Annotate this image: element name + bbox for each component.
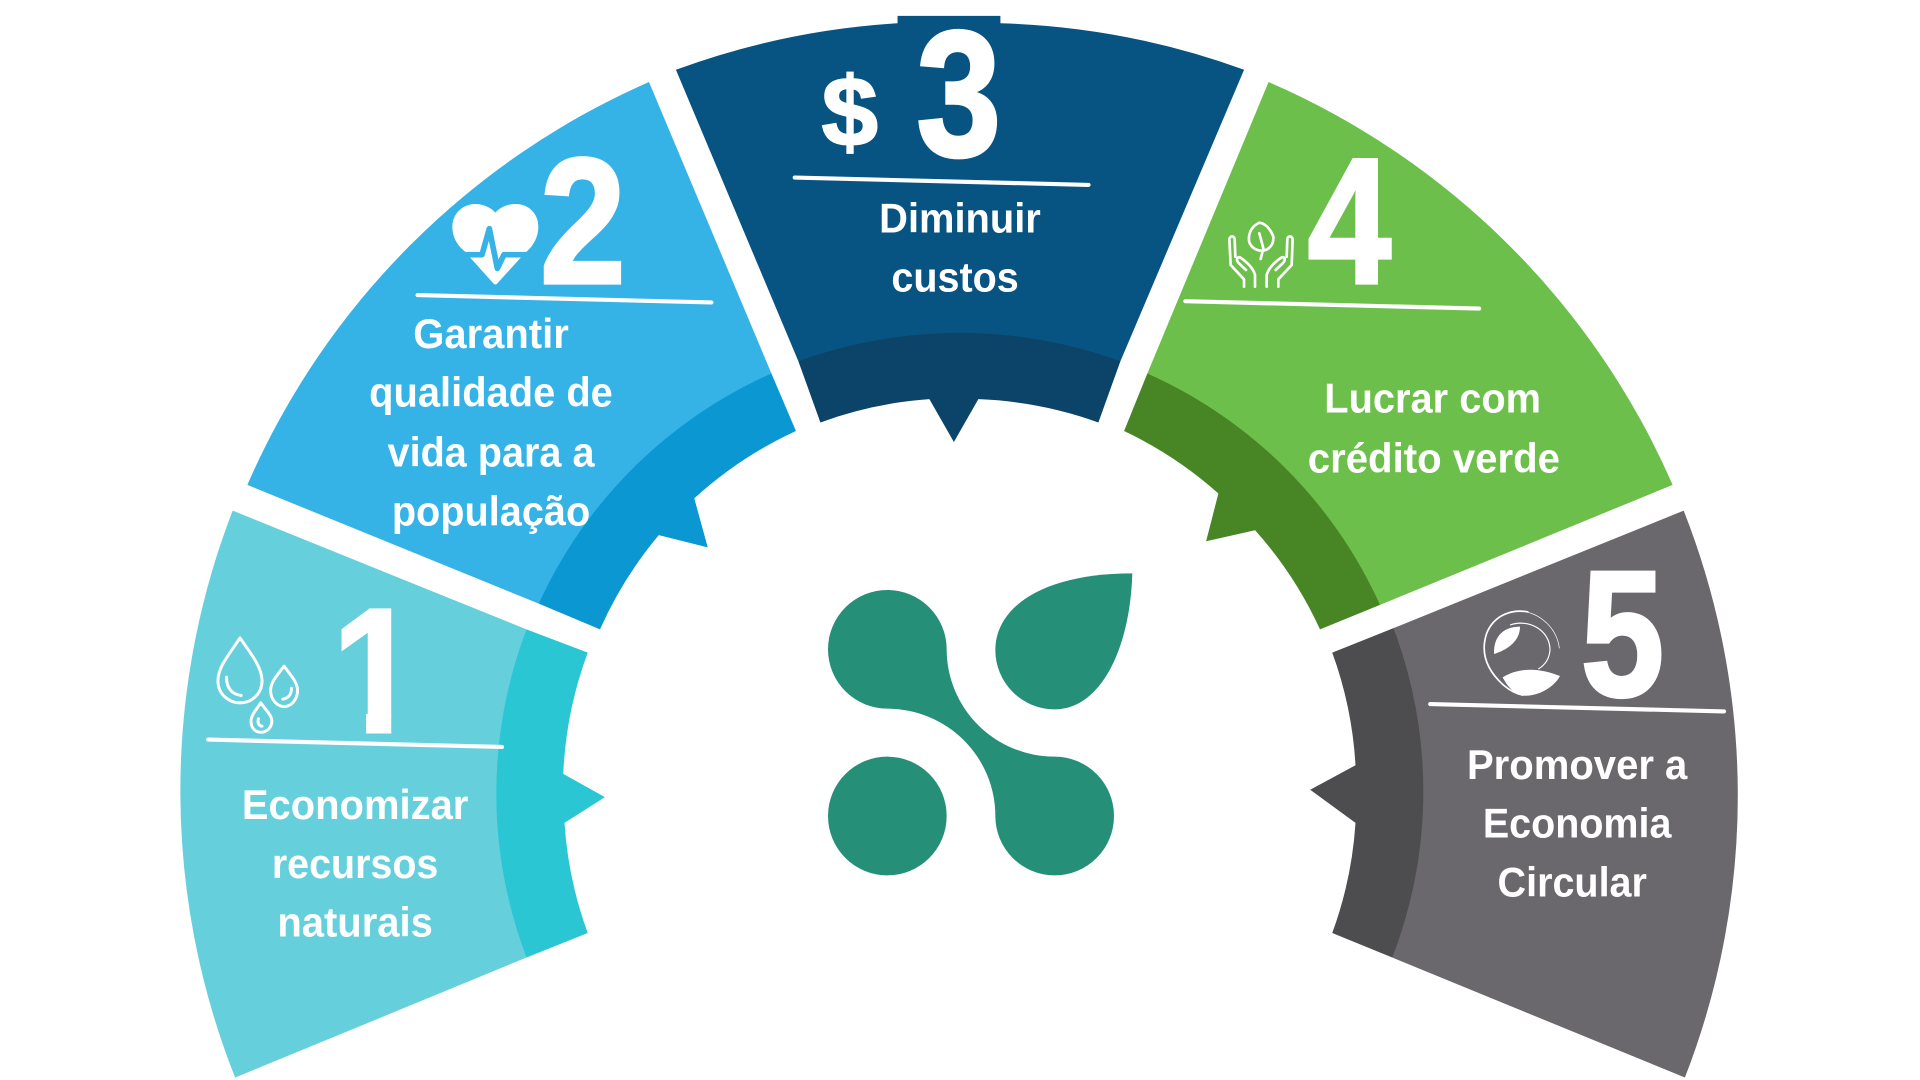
text: Promover a Economia Circular: Promover a bbox=[1467, 741, 1688, 788]
segment 4 dark inner band with pointer bbox=[1124, 373, 1380, 629]
segment 2 dark inner band with pointer bbox=[539, 373, 796, 629]
text: Diminuir custos: custos bbox=[891, 253, 1019, 300]
panel: segment 4 Lucrar com crédito verde bbox=[1124, 82, 1673, 629]
text: Promover a Economia Circular: Circular bbox=[1498, 858, 1647, 905]
segment 1 light background bbox=[180, 511, 527, 1078]
icon: water drops bbox=[218, 638, 298, 732]
text: Economizar recursos naturais bbox=[242, 781, 468, 946]
segment 5 light background bbox=[1392, 511, 1738, 1078]
panel: segment 5 Promover a Economia Circular bbox=[1310, 511, 1738, 1078]
icon: heart with pulse bbox=[452, 204, 538, 284]
text: Promover a Economia Circular: Economia bbox=[1483, 800, 1672, 847]
text: Garantir qualidade de vida para a população: Garantir bbox=[413, 310, 569, 357]
divider line 5 bbox=[1430, 704, 1724, 711]
divider line 1 bbox=[208, 740, 502, 747]
divider line 2 bbox=[418, 295, 711, 302]
text: Garantir qualidade de vida para a população: qualidade de bbox=[369, 369, 613, 416]
icon: dollar sign: $ bbox=[822, 57, 878, 167]
icon: circular economy leaves bbox=[1484, 611, 1560, 696]
segment 4 light background bbox=[1147, 82, 1673, 605]
text: Garantir qualidade de vida para a população: vida para a bbox=[388, 429, 595, 476]
text: Garantir qualidade de vida para a população bbox=[369, 310, 613, 534]
number 5: 5 bbox=[1581, 534, 1664, 734]
text: Garantir qualidade de vida para a população: população bbox=[392, 487, 590, 534]
text: Lucrar com crédito verde: Lucrar com bbox=[1324, 375, 1541, 422]
text: Lucrar com crédito verde bbox=[1308, 375, 1560, 482]
number 4: 4 bbox=[1308, 121, 1391, 321]
text: Lucrar com crédito verde: crédito verde bbox=[1308, 435, 1560, 482]
panel: segment 1 Economizar recursos naturais bbox=[180, 511, 605, 1078]
divider line 3 bbox=[795, 178, 1089, 185]
logo: central green mark bbox=[828, 573, 1132, 875]
panel: segment 3 Diminuir custos bbox=[676, 0, 1244, 442]
segment 2 light background bbox=[247, 82, 771, 604]
segment 1 dark inner band with pointer bbox=[496, 629, 605, 958]
text: Economizar recursos naturais: recursos bbox=[272, 840, 438, 887]
panel: segment 2 Garantir qualidade de vida bbox=[247, 82, 796, 629]
infographic: semicircular wheel with five benefits bbox=[180, 16, 1738, 1078]
text: Diminuir custos: Diminuir bbox=[879, 195, 1041, 242]
divider line 4 bbox=[1185, 301, 1479, 309]
number 2: 2 bbox=[540, 121, 626, 321]
number 1: 1 bbox=[332, 571, 420, 772]
text: Diminuir custos bbox=[879, 195, 1041, 300]
segment 5 dark inner band with pointer bbox=[1310, 628, 1423, 958]
text: Economizar recursos naturais: Economizar bbox=[242, 781, 468, 828]
segment 3 dark inner band with pointer bbox=[798, 333, 1120, 442]
icon: hands holding leaf bbox=[1229, 223, 1293, 287]
segment 3 background bbox=[676, 16, 1244, 361]
text: Economizar recursos naturais: naturais bbox=[277, 899, 433, 946]
text: Promover a Economia Circular bbox=[1467, 741, 1688, 905]
